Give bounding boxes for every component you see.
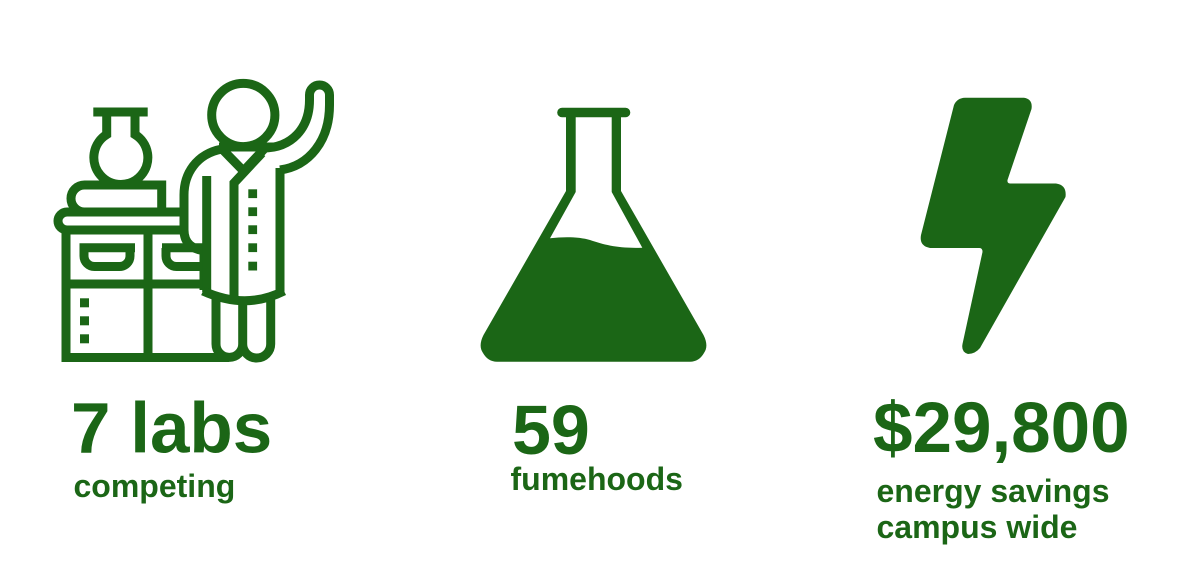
icon: lightning bolt (921, 98, 1066, 354)
caption: energy savings campus wide: energy savings (876, 473, 1110, 509)
stat: $29,800 energy savings (873, 389, 1130, 545)
caption: energy savings campus wide: campus wide (876, 509, 1077, 545)
icon: conical flask (481, 108, 706, 362)
small round flask on bench (93, 112, 148, 184)
stat: 59 fumehoods (510, 391, 683, 497)
scientist legs (216, 296, 271, 358)
scientist raised arm (263, 85, 330, 170)
number: 59: 59 (512, 391, 590, 469)
caption: energy savings campus wide (876, 473, 1110, 545)
caption: competing: competing (74, 468, 235, 504)
lab coat (184, 147, 284, 301)
number: 7 labs: 7 labs (71, 390, 272, 468)
scientist head (212, 83, 275, 147)
coat buttons (248, 189, 257, 270)
book under small flask (71, 185, 162, 212)
caption: fumehoods: fumehoods (510, 461, 683, 497)
cabinet handle dots (80, 298, 89, 343)
bench top (58, 212, 182, 230)
stat: 7 labs competing (71, 390, 272, 504)
icon: scientist at lab bench (58, 83, 330, 358)
number: $29,800: $29,800 (873, 389, 1130, 468)
bench cabinets (66, 230, 229, 358)
